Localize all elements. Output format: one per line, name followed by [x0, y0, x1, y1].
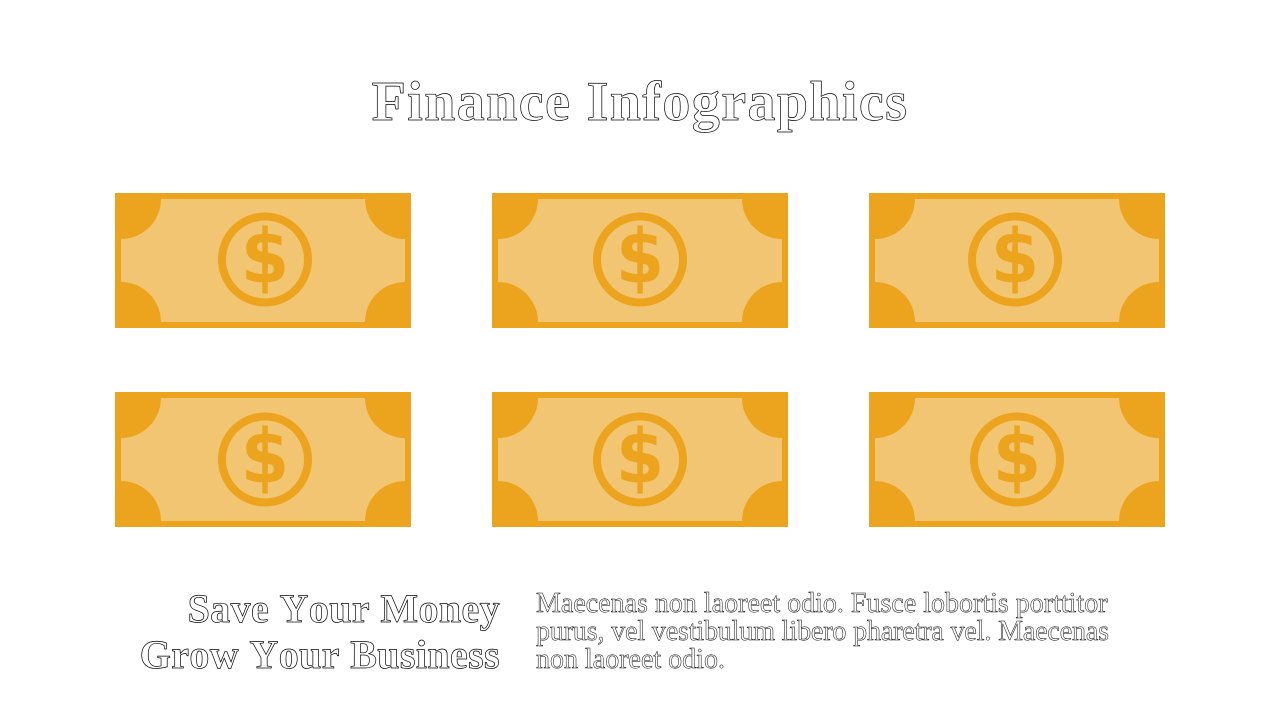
icon: banknote 2: $: [616, 214, 664, 301]
icon: banknote 4: $: [241, 414, 289, 501]
icon: banknote 5: $: [616, 414, 664, 501]
icon: banknote 3: [869, 193, 1165, 328]
icon: banknote 1: $: [241, 214, 289, 301]
icon: banknote 4: [115, 392, 411, 527]
icon: banknote 6: [869, 392, 1165, 527]
body text: [536, 588, 1109, 675]
subheading: Save Your Money: [188, 586, 500, 631]
icon: banknote 6: $: [993, 414, 1041, 501]
body text: purus, vel vestibulum libero pharetra vel. Maecenas: [536, 616, 1109, 647]
body text: non laoreet odio.: [536, 644, 725, 675]
title: Finance Infographics: [372, 70, 908, 132]
icon: banknote 1: [115, 193, 411, 328]
body text: Maecenas non laoreet odio. Fusce lobortis porttitor: [536, 588, 1108, 619]
subheading: Grow Your Business: [140, 632, 500, 676]
icon: banknote 2: [492, 193, 788, 328]
icon: banknote 5: [492, 392, 788, 527]
icon: banknote 3: $: [991, 214, 1039, 301]
subheading: [140, 586, 500, 676]
